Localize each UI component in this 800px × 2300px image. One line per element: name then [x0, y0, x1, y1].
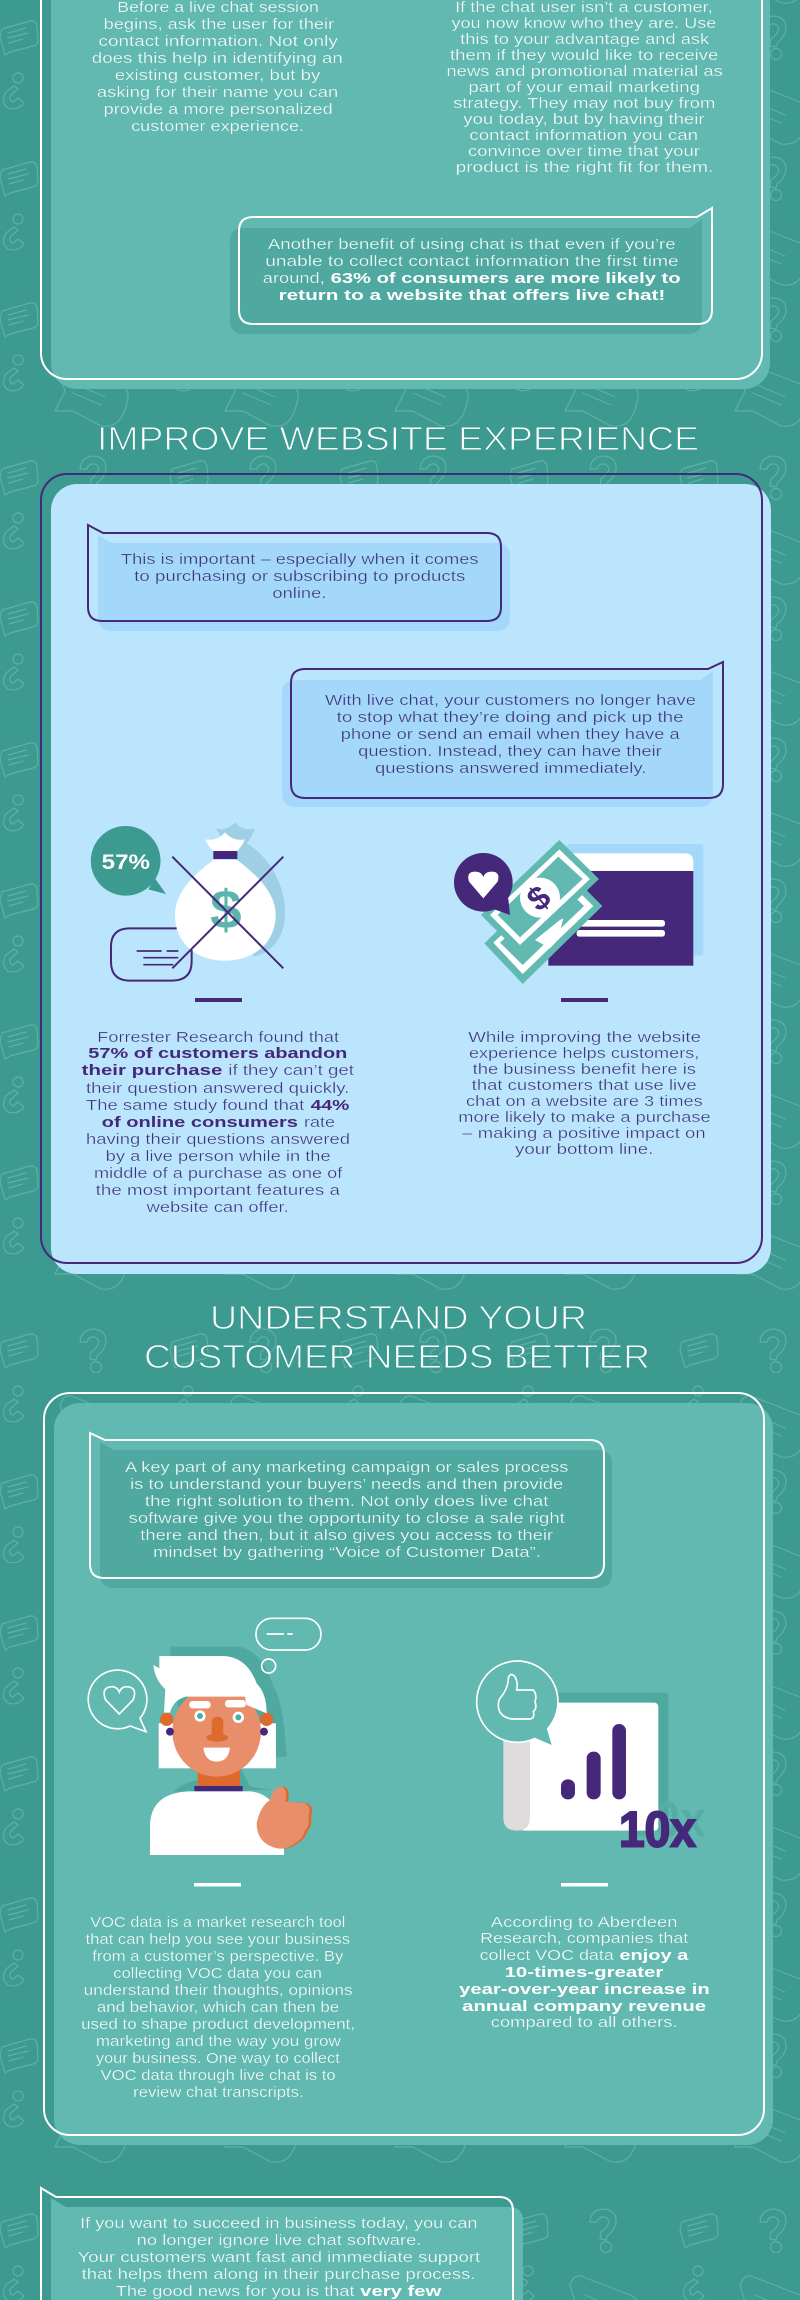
text: before a live chat session: existing customer, but by [115, 67, 321, 84]
panel: understand customer needs [44, 1393, 773, 2145]
text: according to aberdeen research: year-over-year increase in [459, 1981, 710, 1998]
icon: bars [561, 1724, 626, 1799]
callout: a key part of any marketing campaign: A key part of any marketing campaign or sales process [125, 1459, 568, 1476]
heading: understand your customer needs better: UNDERSTAND YOUR [210, 1299, 587, 1336]
text: voc data: your business. One way to collect [96, 2050, 341, 2067]
icon: chat outline [111, 928, 192, 981]
text: if the chat user isn't a customer: you now know who they are. Use [452, 15, 716, 32]
text: according to aberdeen research: compared to all others. [491, 2014, 678, 2031]
icon: shirt [150, 1786, 284, 1855]
text: voc data: from a customer’s perspective. By [92, 1948, 344, 1965]
callout: a key part of any marketing campaign: the right solution to them. Not only does live chat [145, 1493, 550, 1510]
callout: with live chat: questions answered immediately. [375, 760, 646, 777]
icon: cross [172, 857, 283, 968]
callout: 63% of consumers: around, [263, 270, 325, 287]
callout: a key part of any marketing campaign: there and then, but it also gives you access to their [140, 1527, 553, 1544]
heading: understand your customer needs better [144, 1299, 650, 1375]
text: forrester research: by a live person while in the [106, 1148, 331, 1165]
text: according to aberdeen research: annual company revenue [462, 1998, 706, 2015]
text: according to aberdeen research [459, 1914, 710, 2031]
text: forrester research: 57% of customers abandon [88, 1045, 347, 1062]
callout: a key part of any marketing campaign [90, 1433, 612, 1588]
text: forrester research: if they can’t get [228, 1062, 355, 1079]
text: voc data: VOC data is a market research tool [90, 1914, 345, 1931]
callout: with live chat: With live chat, your customers no longer have [325, 692, 696, 709]
callout: this is important [88, 525, 510, 631]
icon: hair top [153, 1656, 267, 1713]
icon: hair back [159, 1723, 276, 1768]
callout: a key part of any marketing campaign: software give you the opportunity to close a sale right [129, 1510, 566, 1527]
text: if the chat user isn't a customer: strategy. They may not buy from [453, 95, 715, 112]
text: if the chat user isn't a customer: contact information you can [469, 127, 698, 144]
callout: a key part of any marketing campaign: mindset by gathering “Voice of Customer Data”. [153, 1544, 541, 1561]
icon: banknotes [481, 840, 602, 984]
text: forrester research [82, 1029, 355, 1216]
icon: banknotes: $ [520, 878, 559, 919]
text: forrester research: the most important features a [96, 1182, 341, 1199]
callout: conclusion bubble: Your customers want fast and immediate support [78, 2249, 481, 2266]
callout: with live chat [282, 662, 723, 807]
text: before a live chat session: does this help in identifying an [92, 50, 343, 67]
text: voc data: and behavior, which can then be [97, 1999, 339, 2016]
text: before a live chat session: begins, ask the user for their [104, 16, 334, 33]
text: voc data: that can help you see your business [86, 1931, 350, 1948]
text: while improving the website experience: your bottom line. [515, 1141, 653, 1158]
text: while improving the website experience: – making a positive impact on [462, 1125, 706, 1142]
text: according to aberdeen research: According to Aberdeen [491, 1914, 678, 1931]
callout: this is important: to purchasing or subscribing to products [134, 568, 465, 585]
text: according to aberdeen research: enjoy a [619, 1947, 689, 1964]
icon: 57% bubble [91, 826, 166, 896]
text: while improving the website experience: chat on a website are 3 times [466, 1093, 703, 1110]
icon: credit card and banknotes with heart bubble [454, 840, 703, 984]
text: forrester research: middle of a purchase as one of [94, 1165, 343, 1182]
text: voc data: understand their thoughts, opinions [84, 1982, 353, 1999]
callout: with live chat: phone or send an email when they have a [341, 726, 680, 743]
text: while improving the website experience: the business benefit here is [473, 1061, 696, 1078]
heading: improve website experience: IMPROVE WEBSITE EXPERIENCE [97, 420, 699, 457]
icon: 57% bubble: 57% [102, 850, 150, 874]
text: while improving the website experience [458, 1029, 711, 1158]
icon: heart speech bubble [88, 1670, 147, 1732]
text: if the chat user isn't a customer [446, 0, 723, 176]
icon: smiling customer giving thumbs up [88, 1618, 321, 1855]
icon: head [160, 1687, 273, 1790]
icon: thumbs up hand [257, 1787, 312, 1849]
text: forrester research: 44% [311, 1097, 349, 1114]
text: before a live chat session [92, 0, 343, 135]
icon: report with bar chart and 10x [477, 1661, 706, 1858]
callout: 63% of consumers: return to a website that offers live chat! [279, 287, 665, 304]
callout: 63% of consumers: Another benefit of using chat is that even if you’re [268, 236, 676, 253]
callout: a key part of any marketing campaign: is to understand your buyers’ needs and then provide [130, 1476, 563, 1493]
icon: report page [503, 1693, 706, 1848]
icon: bag shadow [216, 823, 285, 957]
text: before a live chat session: customer experience. [131, 118, 304, 135]
icon: heart bubble [454, 853, 513, 915]
text: voc data: review chat transcripts. [133, 2084, 304, 2101]
callout: with live chat: question. Instead, they can have their [358, 743, 662, 760]
text: while improving the website experience: While improving the website [468, 1029, 701, 1046]
text: before a live chat session: contact information. Not only [98, 33, 338, 50]
callout: conclusion bubble: If you want to succeed in business today, you can [80, 2215, 477, 2232]
text: if the chat user isn't a customer: this to your advantage and ask [460, 31, 710, 48]
callout: 63% of consumers [230, 208, 712, 334]
text: forrester research: website can offer. [145, 1199, 289, 1216]
icon: character shadow [170, 1647, 287, 1792]
callout: conclusion bubble: The good news for you is that [116, 2283, 356, 2300]
text: forrester research: Forrester Research found that [97, 1029, 340, 1046]
callout: conclusion bubble: very few [360, 2283, 442, 2300]
icon: thought bubble [256, 1618, 321, 1673]
text: forrester research: of online consumers [102, 1114, 298, 1131]
icon: card [548, 844, 703, 966]
icon: 10x label: 10x [619, 1802, 696, 1858]
text: if the chat user isn't a customer: you today, but by having their [463, 111, 705, 128]
text: voc data: marketing and the way you grow [96, 2033, 341, 2050]
callout: 63% of consumers: 63% of consumers are more likely to [331, 270, 681, 287]
panel: improve website experience [41, 474, 771, 1274]
callout: conclusion bubble: no longer ignore live chat software. [137, 2232, 421, 2249]
icon: money bag crossed out with 57% bubble [91, 823, 285, 981]
callout: conclusion bubble: that helps them along in their purchase process. [82, 2266, 475, 2283]
callout: this is important: This is important – especially when it comes [121, 551, 479, 568]
callout: this is important: online. [272, 585, 326, 602]
text: while improving the website experience: that customers that use live [472, 1077, 697, 1094]
text: if the chat user isn't a customer: part of your email marketing [468, 79, 700, 96]
heading: understand your customer needs better: CUSTOMER NEEDS BETTER [144, 1338, 650, 1375]
text: while improving the website experience: more likely to make a purchase [458, 1109, 711, 1126]
text: before a live chat session: asking for their name you can [97, 84, 338, 101]
text: voc data: VOC data through live chat is to [100, 2067, 336, 2084]
callout: 63% of consumers: unable to collect contact information the first time [265, 253, 679, 270]
text: forrester research: having their questions answered [86, 1131, 350, 1148]
text: before a live chat session: provide a more personalized [104, 101, 333, 118]
icon: money bag crossed out with 57% bubble: $ [210, 878, 242, 940]
icon: thumbs up bubble [477, 1661, 558, 1745]
text: forrester research: rate [304, 1114, 335, 1131]
text: if the chat user isn't a customer: news and promotional material as [446, 63, 723, 80]
text: voc data: used to shape product development, [81, 2016, 355, 2033]
text: forrester research: their purchase [82, 1062, 222, 1079]
text: voc data: collecting VOC data you can [113, 1965, 322, 1982]
text: forrester research: their question answered quickly. [86, 1080, 349, 1097]
text: if the chat user isn't a customer: product is the right fit for them. [456, 159, 713, 176]
text: if the chat user isn't a customer: convince over time that your [468, 143, 700, 160]
icon: white bag [175, 832, 276, 961]
text: according to aberdeen research: collect VOC data [480, 1947, 615, 1964]
icon: report page: 10x [629, 1792, 706, 1848]
callout: with live chat: to stop what they’re doing and pick up the [337, 709, 684, 726]
text: according to aberdeen research: Research, companies that [480, 1930, 689, 1947]
panel: collect contact information [41, 0, 770, 389]
text: voc data [81, 1914, 355, 2101]
text: forrester research: The same study found that [86, 1097, 305, 1114]
text: according to aberdeen research: 10-times-greater [505, 1964, 664, 1981]
text: if the chat user isn't a customer: them if they would like to receive [450, 47, 718, 64]
callout: conclusion bubble [41, 2188, 523, 2300]
text: while improving the website experience: experience helps customers, [469, 1045, 699, 1062]
